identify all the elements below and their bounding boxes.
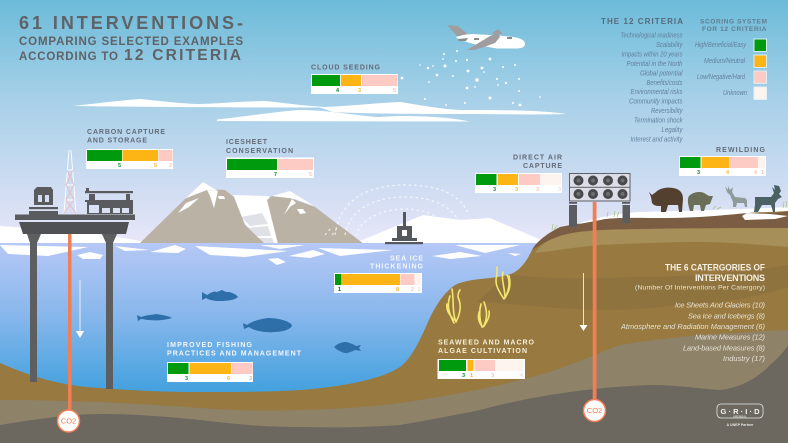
score bar <box>679 156 766 176</box>
legend heading <box>700 18 768 33</box>
criteria items: Benefits/costs <box>646 78 683 87</box>
control block <box>29 187 58 214</box>
CO2 pipe right <box>593 202 596 401</box>
score bar <box>226 158 314 178</box>
engines <box>458 37 512 41</box>
categories subheading: (Number Of Interventions Per Catergory) <box>635 284 765 292</box>
title: 12 CRITERIA <box>124 47 241 64</box>
score bar: 3 <box>536 187 539 193</box>
far wing <box>491 29 503 34</box>
categories heading: THE 6 CATERGORIES OF <box>665 262 765 272</box>
label <box>438 340 535 355</box>
categories list: Atmosphere and Radiation Management (6) <box>620 322 766 331</box>
score bar: 2 <box>411 287 414 293</box>
label: ALGAE CULTIVATION <box>438 348 527 355</box>
score bar: 5 <box>393 88 396 94</box>
seaweed <box>447 267 510 327</box>
criteria heading: THE 12 CRITERIA <box>601 17 683 26</box>
score bar: 1 <box>338 287 341 293</box>
label: ICESHEET <box>226 139 268 146</box>
label: SEAWEED AND MACRO <box>438 340 535 346</box>
score bar: 2 <box>169 163 172 169</box>
label: REWILDING <box>716 147 766 154</box>
categories of interventions <box>620 262 766 363</box>
background ice hills right <box>355 215 548 243</box>
upper cloud <box>73 99 566 114</box>
seaweed clump 3 <box>496 267 510 299</box>
light tan layer <box>535 228 788 253</box>
CO2 marker left <box>58 410 80 432</box>
right peak <box>267 191 364 244</box>
score bar <box>167 362 253 382</box>
score bar <box>334 273 422 293</box>
label <box>370 256 424 270</box>
grass tufts <box>552 201 787 230</box>
snow on land <box>578 207 788 224</box>
legend heading: FOR 12 CRITERIA <box>702 26 767 33</box>
bison <box>649 188 683 212</box>
bar: carbon capture and storage <box>86 129 173 169</box>
score bar: 3 <box>558 187 561 193</box>
legend low: Low/Negative/Hard <box>697 72 746 81</box>
left peak <box>140 182 265 244</box>
label <box>167 342 302 358</box>
icon: sea ice thickening spray <box>325 185 468 236</box>
categories list: Land-based Measures (8) <box>683 343 766 352</box>
categories list <box>620 300 766 363</box>
bar: rewilding <box>679 147 766 176</box>
fish 4 flatfish <box>334 342 361 353</box>
score bar: 3 <box>185 376 188 382</box>
score bar: 4 <box>520 373 524 379</box>
brown sediment layer <box>0 208 788 443</box>
criteria items: Community impacts <box>629 97 683 106</box>
background ice shelf left <box>0 226 150 243</box>
score bar: 1 <box>470 373 473 379</box>
sea <box>0 243 560 403</box>
clouds <box>73 99 566 122</box>
bar: icesheet conservation <box>226 139 314 178</box>
categories list: Ice Sheets And Glaciers (10) <box>675 300 766 310</box>
grey-tan rock layer <box>0 330 788 443</box>
scoring system legend <box>695 18 768 100</box>
score bar: 3 <box>491 373 494 379</box>
darker band <box>477 265 788 310</box>
bar: cloud seeding <box>311 64 398 94</box>
label: CARBON CAPTURE <box>87 129 165 136</box>
logo: GRID Arendal: A UNEP Partner <box>727 423 754 427</box>
categories heading: INTERVENTIONS <box>695 273 765 283</box>
dark brown top soil <box>532 211 788 250</box>
label: DIRECT AIR <box>513 154 562 162</box>
score bar: 3 <box>697 170 700 176</box>
fish 3 <box>243 318 292 332</box>
platform hull <box>19 222 129 234</box>
bar: seaweed and macro algae <box>438 340 535 379</box>
label: CAPTURE <box>523 163 562 170</box>
seaweed clump 1 <box>447 289 460 323</box>
score bar: 1 <box>417 287 420 293</box>
legend high: High/Beneficial/Easy <box>695 40 746 49</box>
platform legs <box>27 234 117 389</box>
icon: sea ice thickening pump <box>385 212 423 244</box>
arrow down in land <box>580 273 588 331</box>
label: CLOUD SEEDING <box>311 64 381 72</box>
criteria items: Technological readiness <box>620 30 683 40</box>
score bar: 6 <box>227 376 230 382</box>
criteria items: Potential in the North <box>626 59 683 68</box>
categories list: Marine Measures (12) <box>695 333 766 342</box>
logo: GRID Arendal: ARENDAL <box>733 414 747 418</box>
logo: GRID Arendal <box>717 404 763 427</box>
score bar: 4 <box>726 170 730 176</box>
animals <box>649 185 782 212</box>
score bar: 3 <box>358 88 361 94</box>
criteria items: Interest and activity <box>630 134 683 144</box>
reindeer <box>754 185 782 212</box>
score bar <box>311 74 398 94</box>
score bar: 8 <box>396 287 399 293</box>
label: IMPROVED FISHING <box>167 342 253 349</box>
criteria items: Impacts within 20 years <box>622 49 683 58</box>
score bar: 5 <box>309 172 312 178</box>
label <box>226 139 293 155</box>
fish <box>137 290 361 353</box>
score bar: 3 <box>462 373 465 379</box>
legend medium: Medium/Neutral <box>704 56 745 65</box>
fans <box>574 176 628 199</box>
CO2 marker right: CO2 <box>587 406 602 415</box>
score bar: 1 <box>761 170 764 176</box>
label <box>513 154 562 170</box>
criteria items <box>620 30 683 144</box>
icon: plane seeding clouds <box>447 25 525 50</box>
title: 61 INTERVENTIONS- <box>19 13 243 33</box>
derrick <box>64 150 76 213</box>
criteria items: Termination shock <box>634 116 683 125</box>
sea ice floes <box>0 245 521 265</box>
icon: offshore platform <box>15 150 135 412</box>
score bar: 3 <box>515 187 518 193</box>
label <box>87 129 165 144</box>
icon: direct air capture unit <box>569 174 630 401</box>
criteria items: Legality <box>662 125 683 134</box>
snow from cloud seeding <box>401 50 541 106</box>
score bar <box>438 359 525 379</box>
score bar: 4 <box>336 88 340 94</box>
fan hubs <box>576 178 624 196</box>
score bar <box>86 149 173 169</box>
glacier <box>233 195 280 244</box>
categories list: Industry (17) <box>723 354 766 363</box>
score bar <box>475 173 562 193</box>
seaweed clump 2 <box>478 302 489 327</box>
score bar: 7 <box>274 172 277 178</box>
criteria items: Scalability <box>656 40 683 49</box>
bar: direct air capture <box>475 154 562 193</box>
sky background <box>0 0 788 245</box>
legend unknown: Unknown <box>723 88 747 97</box>
land and sea bed <box>0 207 788 443</box>
bar: improved fishing <box>167 342 302 382</box>
criteria items: Global potential <box>640 68 683 77</box>
label: PRACTICES AND MANAGEMENT <box>167 350 302 358</box>
criteria items: Environmental risks <box>630 87 683 96</box>
score bar: 5 <box>154 163 157 169</box>
criteria items: Reversibility <box>651 106 683 115</box>
categories heading <box>665 262 765 283</box>
label: AND STORAGE <box>87 138 147 144</box>
CO2 marker left: CO2 <box>61 416 76 426</box>
plane tail <box>447 25 470 38</box>
fan housing <box>570 174 630 201</box>
label: SEA ICE <box>390 256 423 262</box>
deer <box>725 186 747 207</box>
score bar: 3 <box>493 187 496 193</box>
categories list: Sea Ice and Icebergs (8) <box>688 311 766 320</box>
bar: sea ice thickening <box>334 256 424 293</box>
arrow down in water <box>76 280 84 338</box>
mountains <box>140 182 364 244</box>
label: CONSERVATION <box>226 148 293 155</box>
muskox <box>688 192 713 211</box>
platform deck <box>15 214 135 220</box>
title <box>19 13 243 64</box>
logo: GRID Arendal: G·R·I·D <box>720 407 760 416</box>
legend heading: SCORING SYSTEM <box>700 18 768 26</box>
fish 2 <box>137 314 172 321</box>
CO2 injection pipe <box>68 234 72 412</box>
fish 1 <box>202 290 238 301</box>
title: COMPARING SELECTED EXAMPLES <box>19 36 243 48</box>
dark bedrock layer <box>0 345 788 443</box>
score bar: 3 <box>249 376 252 382</box>
near wing <box>467 33 500 50</box>
CO2 marker right <box>584 400 606 422</box>
accommodation building <box>85 188 133 214</box>
unit legs <box>569 202 630 227</box>
lower cloud <box>217 110 470 122</box>
plane body <box>456 34 525 48</box>
criteria list <box>601 17 683 144</box>
title: ACCORDING TO <box>19 51 118 63</box>
score bar: 4 <box>754 170 758 176</box>
score bar: 5 <box>118 163 121 169</box>
label: THICKENING <box>370 264 424 270</box>
